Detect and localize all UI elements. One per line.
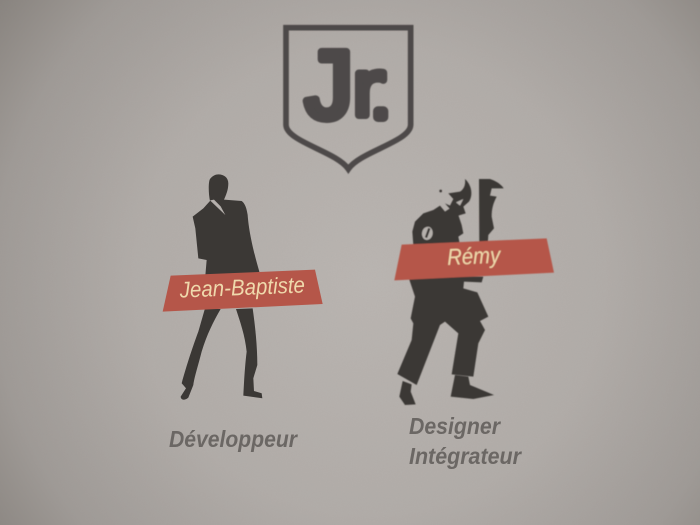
shield outline: [286, 28, 411, 169]
name: Rémy: [447, 242, 502, 270]
boot right: [451, 375, 494, 399]
boot left: [399, 381, 416, 405]
figure: Jean-Baptiste: [163, 174, 323, 400]
logo: Jr. shield: [286, 28, 411, 169]
name: Jean-Baptiste: [178, 271, 305, 303]
logo text: .: [375, 90, 386, 125]
role line 1: Designer: [409, 413, 501, 439]
wrench: [479, 179, 504, 245]
collar slit: [210, 200, 225, 215]
figure: Rémy: [394, 179, 554, 405]
torso: [412, 206, 463, 245]
logo text: r: [352, 44, 384, 133]
role: Designer Intégrateur: [409, 413, 522, 469]
silhouette: upper body and head: [412, 179, 504, 245]
role line 2: Intégrateur: [409, 443, 522, 469]
silhouette: left leg: [181, 308, 221, 400]
silhouette: lower body: [397, 277, 494, 405]
legs: [397, 277, 488, 385]
silhouette: right leg: [236, 308, 262, 398]
silhouette: body: [193, 174, 259, 276]
logo text: J: [298, 36, 358, 149]
head fragments: [445, 179, 471, 216]
name banner: [394, 238, 554, 280]
name banner: [163, 270, 323, 312]
emblem: [421, 226, 434, 241]
role: Développeur: Développeur: [169, 426, 298, 452]
